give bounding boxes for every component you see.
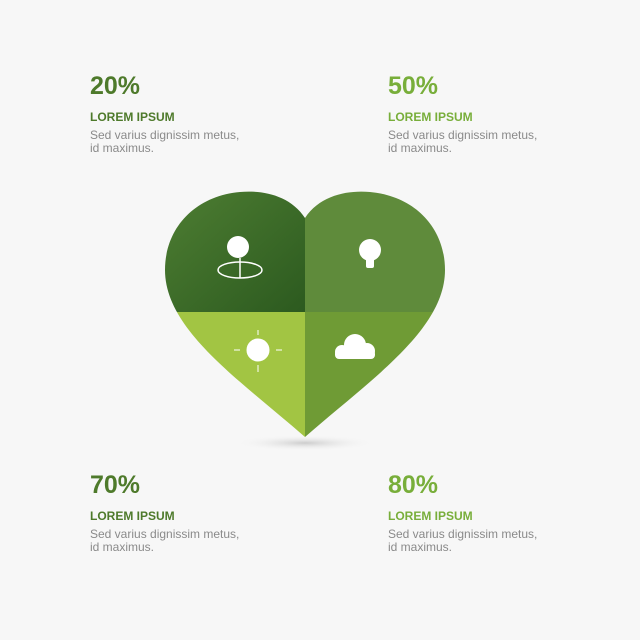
block: 80%: id maximus. xyxy=(388,540,452,554)
block: 20%: LOREM IPSUM xyxy=(90,110,175,124)
block: 20% xyxy=(90,72,239,155)
heart chart xyxy=(165,192,445,448)
block: 50%: Sed varius dignissim metus, xyxy=(388,128,537,142)
block: 50%: id maximus. xyxy=(388,141,452,155)
icon: sun xyxy=(234,330,282,372)
block: 70%: LOREM IPSUM xyxy=(90,509,175,523)
block: 20%: 20% xyxy=(90,72,140,100)
icon: bulb xyxy=(359,239,381,268)
block: 50%: LOREM IPSUM xyxy=(388,110,473,124)
block: 20%: id maximus. xyxy=(90,141,154,155)
block: 70% xyxy=(90,471,239,554)
icon: person xyxy=(218,236,262,278)
block: 20%: Sed varius dignissim metus, xyxy=(90,128,239,142)
block: 50% xyxy=(388,72,537,155)
block: 50%: 50% xyxy=(388,72,438,100)
block: 70%: id maximus. xyxy=(90,540,154,554)
block: 70%: Sed varius dignissim metus, xyxy=(90,527,239,541)
block: 80%: LOREM IPSUM xyxy=(388,509,473,523)
icon: cloud xyxy=(335,334,375,359)
block: 80% xyxy=(388,471,537,554)
block: 80%: Sed varius dignissim metus, xyxy=(388,527,537,541)
block: 70%: 70% xyxy=(90,471,140,499)
block: 80%: 80% xyxy=(388,471,438,499)
